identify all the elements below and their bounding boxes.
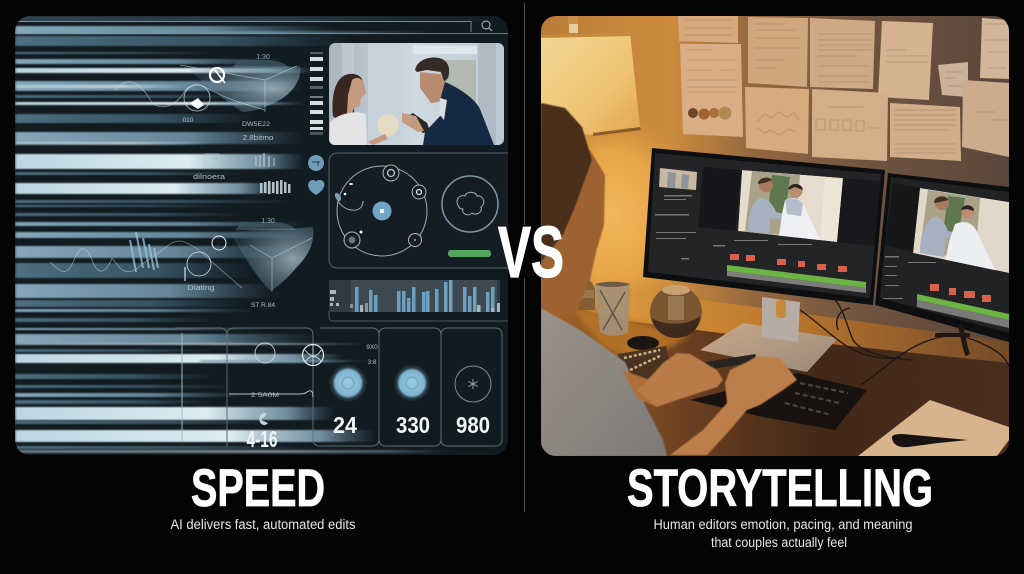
wave chart: upper: DW5E22 — [242, 121, 270, 128]
wave chart: upper: 2.8bitmo — [242, 135, 274, 142]
timeline — [655, 195, 866, 293]
wall — [541, 16, 1009, 366]
stat numbers — [246, 417, 490, 447]
caption: storytelling — [654, 517, 912, 550]
editor person — [541, 103, 797, 456]
audio meter bars — [255, 153, 290, 194]
paper and pen — [858, 400, 1009, 456]
dial: card two — [394, 365, 430, 401]
stat numbers: 24 — [333, 412, 357, 438]
small labels: 9X0 — [366, 344, 378, 351]
desk — [541, 298, 1009, 456]
stat cards grid — [175, 328, 502, 447]
second wave chart: ST R.84 — [251, 302, 275, 309]
wave chart: upper — [115, 54, 300, 142]
second wave chart: 1:30 — [261, 218, 275, 225]
heading: storytelling: STORYTELLING — [627, 459, 933, 518]
second wave chart — [50, 218, 313, 309]
small gear icons — [255, 343, 324, 366]
motion streaks — [15, 16, 452, 454]
dial: card three — [455, 366, 491, 402]
wave chart: upper: 1:30 — [256, 54, 270, 61]
top search bar — [15, 21, 508, 34]
note writing — [685, 20, 1008, 153]
center divider — [524, 3, 526, 512]
clip thumbnail and label: dilnoera — [193, 174, 225, 181]
dial: card one — [330, 364, 366, 402]
caption: storytelling: that couples actually feel — [711, 535, 847, 550]
monitor stand — [700, 297, 838, 372]
vertical level bars — [310, 52, 323, 135]
desk items: jar, pen cup, glass orb — [576, 280, 702, 379]
small labels — [251, 344, 378, 399]
caption: speed: AI delivers fast, automated edits — [170, 517, 356, 532]
clip thumbnail and label — [193, 154, 225, 181]
panel: speed dashboard — [15, 16, 524, 455]
lamp — [541, 16, 641, 136]
thumbnail — [659, 168, 697, 190]
panel: storytelling photo — [527, 16, 1009, 456]
round status icons — [308, 155, 324, 195]
wave chart: upper: 010 — [183, 117, 194, 124]
heading: speed: SPEED — [191, 459, 325, 518]
second wave chart: Diating — [188, 285, 215, 292]
stat numbers: 980 — [456, 412, 490, 438]
right monitor — [875, 173, 1009, 342]
cables — [800, 300, 1009, 385]
histogram panel — [329, 280, 508, 321]
left monitor — [643, 148, 885, 305]
small labels: 3:8 — [367, 359, 377, 366]
wedding photo — [329, 43, 504, 145]
cork notes — [678, 16, 1009, 161]
radial node panel — [329, 153, 524, 268]
caption: storytelling: Human editors emotion, pacing, and meaning — [654, 517, 912, 532]
keyboard — [690, 358, 867, 430]
VS label: VS — [498, 213, 564, 293]
stat numbers: 330 — [396, 412, 430, 438]
small labels: 2 5A0M — [251, 392, 279, 399]
small chip icon — [259, 413, 268, 425]
pinned walnuts — [688, 106, 732, 120]
stat numbers: 4-16 — [246, 426, 278, 452]
